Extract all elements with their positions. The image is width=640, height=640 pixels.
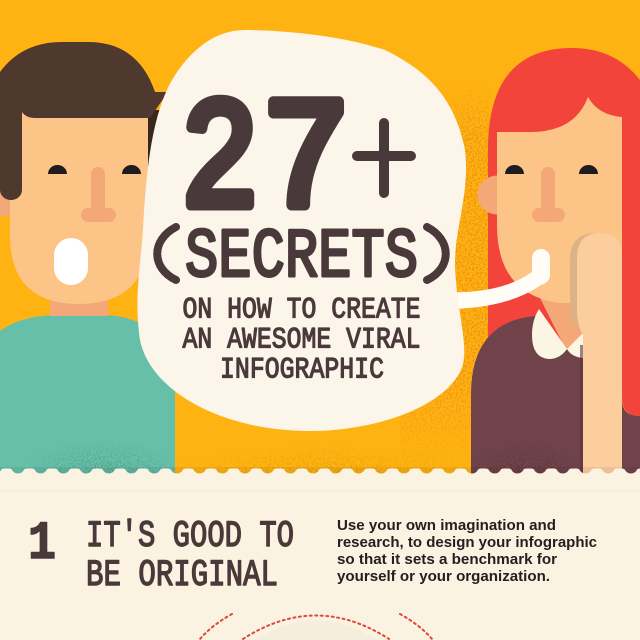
- title: 7: [266, 69, 346, 237]
- number 27: 2: [184, 69, 256, 237]
- woman collar: [532, 309, 586, 359]
- section 1: yourself or your organization.: [337, 569, 550, 585]
- stamp edge panel: [0, 462, 640, 640]
- woman hair: [488, 48, 640, 416]
- section 1: [28, 514, 597, 597]
- man ear: [0, 190, 12, 216]
- man hair shadow: [140, 110, 168, 170]
- secrets: SECRETS: [185, 219, 418, 298]
- title: AN AWESOME VIRAL: [182, 324, 420, 358]
- cream panel: [0, 476, 640, 640]
- speech bubble: [137, 30, 550, 431]
- man nose: [81, 167, 116, 222]
- background: [0, 0, 640, 480]
- finger shadow: [570, 233, 596, 330]
- woman face: [497, 97, 622, 303]
- section 1: research, to design your infographic: [337, 535, 597, 551]
- woman ear: [478, 176, 516, 214]
- man face: [10, 110, 148, 304]
- bubble tail: [440, 249, 550, 309]
- left parenthesis: [157, 227, 176, 280]
- section heading: IT'S GOOD TO: [86, 516, 294, 558]
- woman finger: [577, 233, 622, 476]
- beige circle: [255, 620, 377, 640]
- floor stipple on figures: [30, 415, 583, 476]
- divider: [0, 490, 640, 492]
- bump shading: [0, 467, 640, 476]
- section 1: BE ORIGINAL: [86, 555, 278, 597]
- plus sign: [357, 123, 411, 193]
- outer right dotted arc: [400, 614, 432, 639]
- section 1: so that it sets a benchmark for: [337, 552, 557, 568]
- outer left dotted arc: [200, 614, 232, 639]
- section body text: Use your own imagination and: [337, 518, 556, 534]
- inner dotted arc: [243, 616, 389, 639]
- man eyes: [48, 165, 141, 174]
- man hair: [0, 42, 168, 200]
- section number: 1: [28, 514, 56, 575]
- character: woman: [471, 48, 640, 476]
- next section illustration: dotted arcs: [200, 614, 432, 640]
- right parenthesis: [427, 227, 446, 280]
- bubble body: [137, 30, 466, 431]
- man neck: [50, 285, 108, 316]
- sleeve shadow: [580, 345, 583, 476]
- woman neck: [536, 290, 590, 350]
- subtitle: ON HOW TO CREATE: [182, 294, 420, 328]
- woman eyes: [505, 165, 598, 174]
- woman nose: [532, 167, 565, 222]
- scalloped cream edge: [0, 462, 640, 476]
- character: man: [0, 42, 175, 476]
- woman body: [471, 316, 640, 476]
- man mouth: [54, 238, 88, 285]
- title: INFOGRAPHIC: [220, 354, 384, 388]
- man shoulders: [0, 315, 175, 476]
- title: [157, 69, 446, 388]
- orange stipple around bubble: [0, 0, 640, 480]
